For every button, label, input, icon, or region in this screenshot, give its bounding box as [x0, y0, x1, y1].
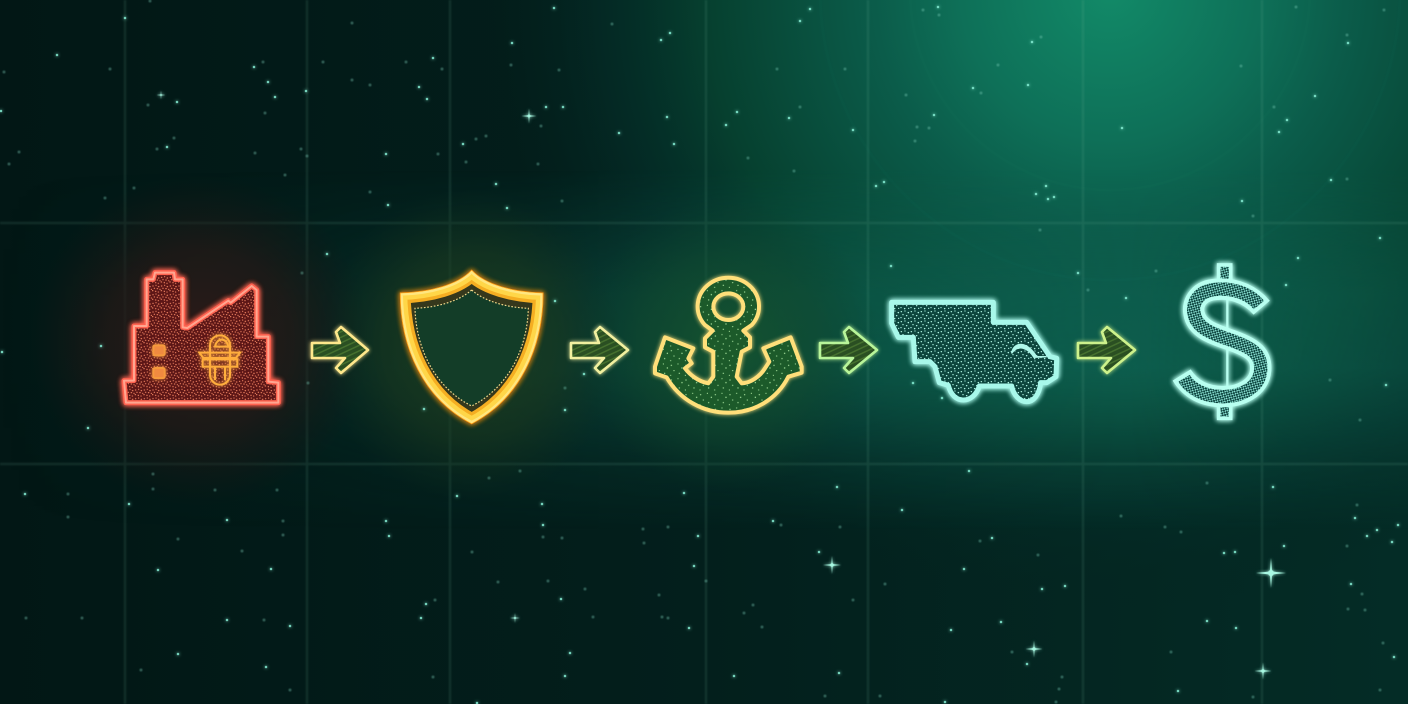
truck body — [892, 302, 1057, 402]
icon: anchor — [655, 278, 802, 413]
shield glow — [401, 271, 543, 423]
shield frame bands — [401, 271, 543, 423]
dollar dotted fill — [1184, 289, 1261, 397]
truck window — [1012, 344, 1047, 357]
dollar center line — [1225, 298, 1230, 387]
dollar glow outline — [1182, 265, 1262, 418]
anchor body — [655, 278, 802, 413]
background — [330, 0, 1408, 704]
icon: factory — [124, 273, 278, 403]
factory outline — [124, 273, 278, 403]
arrow 4 — [1078, 327, 1135, 373]
sparkle stars — [156, 90, 1286, 680]
icon: delivery truck — [892, 302, 1057, 402]
arrow 2 — [571, 327, 628, 373]
factory windows and emblem — [153, 335, 240, 385]
arrow 3 — [820, 327, 877, 373]
icon: dollar sign — [1182, 265, 1262, 418]
arrow 1 — [312, 327, 368, 373]
shield inner panel — [415, 290, 528, 406]
icon: shield — [401, 271, 543, 423]
icon halos — [30, 175, 878, 505]
